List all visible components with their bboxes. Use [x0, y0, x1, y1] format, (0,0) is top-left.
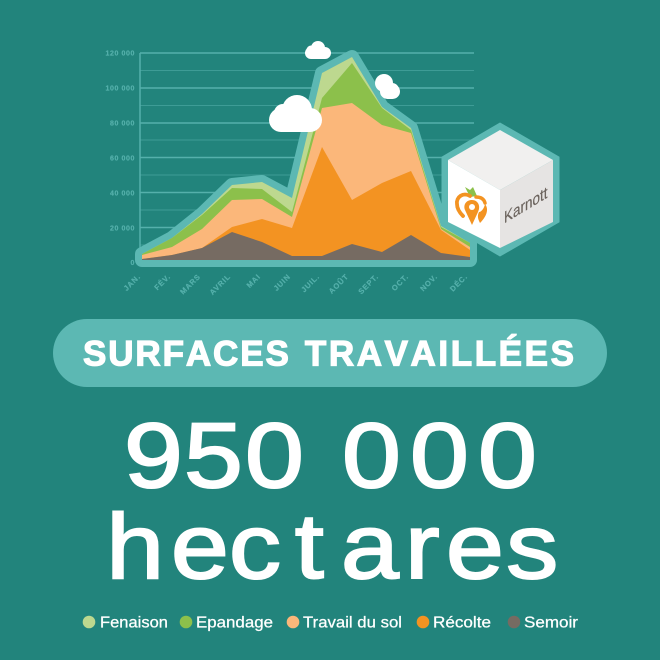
cloud: large — [269, 95, 322, 132]
x axis month labels: NOV. — [418, 272, 439, 293]
y axis labels: 100 000 — [105, 86, 135, 92]
x axis month labels: OCT. — [390, 272, 410, 293]
legend: Epandage: Epandage — [196, 614, 273, 632]
area: Récolte — [142, 147, 470, 260]
y axis labels — [105, 50, 135, 267]
x axis month labels: JUIN — [272, 272, 292, 293]
area: Travail du sol — [142, 103, 470, 260]
x axis month labels: AOÛT — [327, 272, 350, 296]
area chart — [105, 50, 474, 297]
legend: Travail du sol: Travail du sol — [303, 614, 402, 632]
banner title: SURFACES TRAVAILLÉES — [83, 334, 577, 374]
Karnott cube — [442, 123, 559, 256]
y axis labels: 0 — [130, 260, 135, 267]
logo wordmark: Karnott — [504, 182, 548, 227]
y axis labels: 40 000 — [110, 190, 135, 198]
legend: Fenaison: Fenaison — [100, 614, 168, 632]
y axis labels: 120 000 — [105, 50, 135, 58]
y axis labels: 20 000 — [110, 226, 135, 232]
area: Fenaison — [142, 57, 470, 260]
big unit: hectares — [106, 495, 558, 598]
legend — [83, 614, 578, 632]
x axis month labels: FÉV. — [152, 272, 172, 292]
icon: carrot logo — [457, 187, 487, 225]
x axis month labels: MAI — [245, 272, 262, 290]
legend: Semoir — [508, 614, 578, 632]
big number: 950 000 — [124, 404, 537, 507]
area: Epandage — [142, 63, 470, 260]
x axis month labels — [122, 272, 469, 297]
chart outline — [142, 57, 470, 260]
x axis month labels: AVRIL — [208, 272, 232, 297]
cloud: right — [375, 74, 400, 99]
y axis labels: 60 000 — [110, 156, 135, 162]
x axis month labels: SEPT. — [356, 272, 380, 296]
legend: Semoir: Semoir — [524, 614, 578, 632]
banner pill — [53, 319, 607, 387]
legend: Récolte: Récolte — [433, 614, 491, 632]
cloud: top — [305, 41, 331, 59]
x axis month labels: DÉC. — [448, 272, 469, 293]
y axis labels: 80 000 — [110, 120, 135, 128]
x axis month labels: MARS — [178, 272, 202, 296]
x axis month labels: JAN. — [122, 272, 142, 293]
x axis month labels: JUIL. — [299, 272, 321, 294]
area: Semoir — [142, 232, 470, 260]
